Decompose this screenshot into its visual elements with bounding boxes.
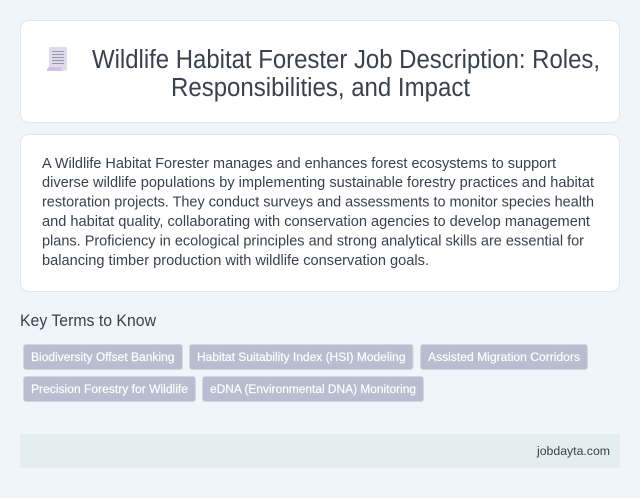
description text: and habitat quality, collaborating with conservation agencies to develop management [42, 214, 590, 230]
tag: eDNA Monitoring [202, 376, 424, 402]
tag: eDNA Monitoring: eDNA (Environmental DNA) Monitoring [210, 382, 416, 396]
title: Responsibilities, and Impact [171, 74, 470, 102]
tag: Biodiversity Offset Banking [24, 344, 182, 370]
tag: Precision Forestry for Wildlife: Precision Forestry for Wildlife [31, 382, 188, 396]
title: Wildlife Habitat Forester Job Description: Roles, [92, 46, 600, 74]
description text: balancing timber production with wildlife conservation goals. [42, 253, 429, 269]
panel: title card [20, 20, 620, 122]
footer bar: jobdayta.com [536, 444, 610, 458]
icon: document scroll [47, 47, 67, 71]
description text [42, 156, 594, 269]
title [92, 46, 600, 102]
tag: Habitat Suitability Index [190, 344, 413, 370]
panel: description card [20, 134, 620, 292]
footer bar [20, 434, 620, 468]
description text: plans. Proficiency in ecological principles and strong analytical skills are essential for [42, 234, 584, 250]
tag: Habitat Suitability Index: Habitat Suitability Index (HSI) Modeling [197, 350, 406, 364]
heading: key terms: Key Terms to Know [20, 312, 156, 330]
description text: A Wildlife Habitat Forester manages and enhances forest ecosystems to support [42, 156, 556, 172]
tag: Precision Forestry for Wildlife [24, 376, 196, 402]
tag: Assisted Migration Corridors: Assisted Migration Corridors [428, 350, 580, 364]
tag: Assisted Migration Corridors [420, 344, 588, 370]
description text: diverse wildlife populations by implementing sustainable forestry practices and habitat [42, 175, 594, 191]
tag: Biodiversity Offset Banking: Biodiversity Offset Banking [31, 350, 175, 364]
description text: restoration projects. They conduct surveys and assessments to monitor species health [42, 195, 594, 211]
